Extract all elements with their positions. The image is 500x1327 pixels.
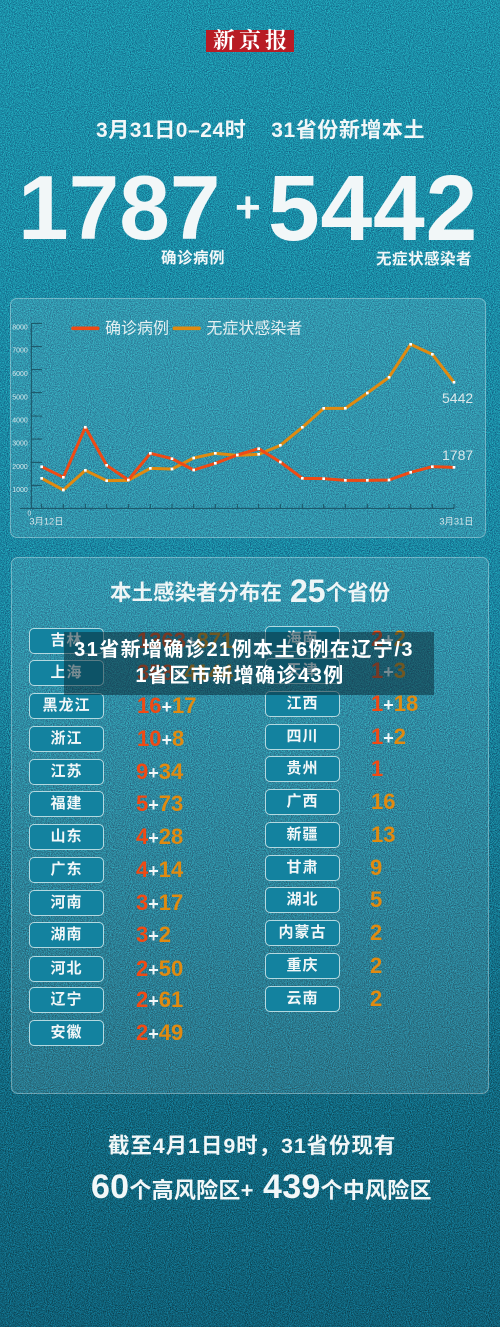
overlay headline banner: 1省区市新增确诊43例 <box>135 665 345 687</box>
plus sign: + <box>235 183 261 232</box>
title line: 3月31日0–24时 31省份新增本土 <box>96 119 425 142</box>
x axis labels: 3月31日 <box>439 517 474 527</box>
row 福建 <box>29 791 183 817</box>
y axis labels: 3000 <box>12 441 28 448</box>
row 内蒙古 <box>265 920 382 946</box>
row 广东: 广东 <box>50 861 82 878</box>
row 湖北 <box>265 887 382 913</box>
row 安徽 <box>29 1020 183 1046</box>
row 吉林: 1363+871 <box>137 628 233 653</box>
row 甘肃 <box>265 855 382 881</box>
end value labels <box>442 390 473 463</box>
overlay headline banner: 31省新增确诊21例本土6例在辽宁/3 <box>74 639 414 661</box>
row 新疆: 新疆 <box>286 826 318 843</box>
row 吉林 <box>29 628 233 654</box>
row 浙江: 浙江 <box>50 730 82 747</box>
row 安徽: 安徽 <box>50 1024 82 1041</box>
row 河南: 河南 <box>50 894 82 911</box>
row 重庆: 2 <box>370 953 382 978</box>
row 河北: 2+50 <box>136 956 183 981</box>
row 辽宁: 2+61 <box>136 987 183 1012</box>
row 江苏 <box>29 759 184 785</box>
row 内蒙古: 内蒙古 <box>278 924 326 941</box>
row 广东: 4+14 <box>136 857 183 882</box>
row 新疆 <box>265 822 395 848</box>
row 辽宁: 辽宁 <box>50 991 82 1008</box>
row 江西 <box>265 691 418 717</box>
row 上海: 上海 <box>50 664 82 681</box>
row 云南 <box>265 986 382 1012</box>
row 四川: 1+2 <box>371 724 406 749</box>
line chart <box>12 320 474 527</box>
y axis labels: 5000 <box>12 394 28 401</box>
row 上海: 358+4144 <box>137 660 233 685</box>
row 福建: 福建 <box>50 795 82 812</box>
row 黑龙江: 黑龙江 <box>42 697 90 714</box>
legend: 确诊病例 <box>105 320 169 338</box>
row 湖南 <box>29 922 171 948</box>
footer line 2: 60个高风险区+ 439个中风险区 <box>91 1168 432 1206</box>
label: asymptomatic: 无症状感染者 <box>376 251 472 268</box>
row 河北: 河北 <box>50 960 82 977</box>
panel: trend chart <box>10 298 486 538</box>
legend <box>73 320 302 338</box>
data points <box>40 343 455 491</box>
row 云南: 2 <box>370 986 382 1011</box>
red line: confirmed <box>42 427 454 480</box>
end value labels: 5442 <box>442 390 473 406</box>
logo: 新京报: 新京报 <box>213 28 291 53</box>
row 甘肃: 甘肃 <box>286 859 318 876</box>
y axis labels: 7000 <box>12 348 28 355</box>
y axis labels: 1000 <box>12 487 28 494</box>
row 重庆 <box>265 953 382 979</box>
row 江苏: 9+34 <box>136 759 183 784</box>
row 湖南: 湖南 <box>50 926 82 943</box>
row 天津: 1+3 <box>371 658 406 683</box>
row 海南: 海南 <box>286 630 318 647</box>
orange line: asymptomatic <box>42 344 454 490</box>
row 湖北: 5 <box>370 887 382 912</box>
y axis labels: 2000 <box>12 464 28 471</box>
row 黑龙江 <box>29 693 196 719</box>
row 重庆: 重庆 <box>286 957 318 974</box>
row 云南: 云南 <box>286 990 318 1007</box>
row 湖北: 湖北 <box>286 891 318 908</box>
panel: province distribution <box>11 557 489 1094</box>
row 山东 <box>29 824 183 850</box>
y axis labels: 4000 <box>12 418 28 425</box>
row 天津 <box>265 658 406 684</box>
row 浙江 <box>29 726 184 752</box>
footer line 1: 截至4月1日9时，31省份现有 <box>108 1134 396 1158</box>
y axis labels <box>12 325 31 517</box>
row 广西 <box>265 789 395 815</box>
end value labels: 1787 <box>442 447 473 463</box>
row 贵州: 贵州 <box>286 760 318 777</box>
overlay headline banner <box>64 632 434 695</box>
left column rows <box>29 628 340 1046</box>
row 江苏: 江苏 <box>50 763 82 780</box>
row 天津: 天津 <box>286 662 318 679</box>
row 浙江: 10+8 <box>137 726 184 751</box>
row 山东: 山东 <box>50 828 82 845</box>
row 甘肃: 9 <box>370 855 382 880</box>
x axis labels <box>29 517 474 527</box>
row 福建: 5+73 <box>136 791 183 816</box>
row 河北 <box>29 956 183 982</box>
row 河南: 3+17 <box>136 890 183 915</box>
right column rows <box>265 626 418 1012</box>
row 内蒙古: 2 <box>370 920 382 945</box>
row 安徽: 2+49 <box>136 1020 183 1045</box>
y axis labels: 0 <box>27 510 31 517</box>
label: confirmed: 确诊病例 <box>161 250 225 267</box>
row 贵州 <box>265 756 383 782</box>
row 山东: 4+28 <box>136 824 183 849</box>
row 河南 <box>29 890 183 916</box>
big number: confirmed: 1787 <box>18 158 220 259</box>
row 江西: 1+18 <box>371 691 418 716</box>
row 广东 <box>29 857 184 883</box>
row 湖南: 3+2 <box>136 922 171 947</box>
row 海南: 2+2 <box>371 626 406 651</box>
row 吉林: 吉林 <box>50 632 82 649</box>
row 辽宁 <box>29 987 183 1013</box>
row 广西: 广西 <box>286 793 318 810</box>
row 上海 <box>29 660 234 686</box>
row 四川: 四川 <box>286 728 318 745</box>
legend: 无症状感染者 <box>206 320 302 338</box>
row 新疆: 13 <box>371 822 395 847</box>
panel heading: 本土感染者分布在 25个省份 <box>110 573 390 609</box>
y axis labels: 8000 <box>12 325 28 332</box>
big number: asymptomatic: 5442 <box>268 156 478 260</box>
row 贵州: 1 <box>371 756 383 781</box>
y axis labels: 6000 <box>12 371 28 378</box>
row 黑龙江: 16+17 <box>137 693 196 718</box>
row 四川 <box>265 724 406 750</box>
row 海南 <box>265 626 406 652</box>
row 江西: 江西 <box>286 695 318 712</box>
row 广西: 16 <box>371 789 395 814</box>
axes <box>20 323 454 508</box>
x axis labels: 3月12日 <box>29 517 64 527</box>
